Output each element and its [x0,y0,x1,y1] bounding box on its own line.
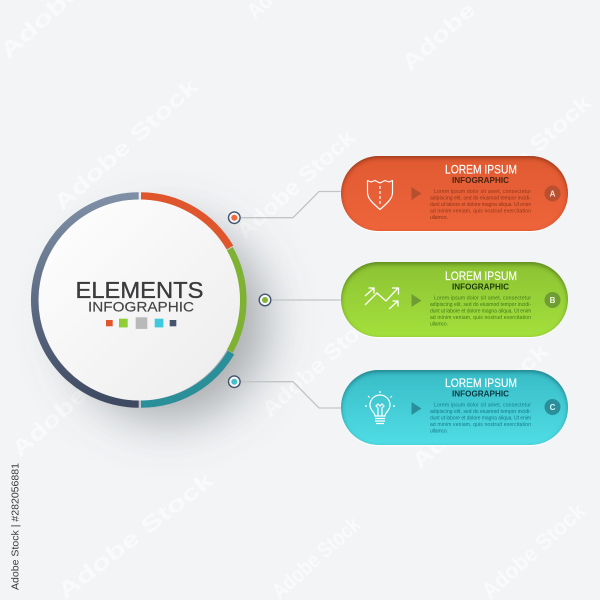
body text: ad minim veniam, quis nostrud exercitation [430,208,531,214]
watermarks: Adobe Stock [457,89,597,219]
body text: Lorem ipsum dolor sit amet, consectetur [434,189,531,195]
body text: Lorem ipsum dolor sit amet, consectetur [434,296,531,302]
badge C: C [550,403,556,412]
body text: ullamco. [430,428,448,434]
watermarks: Adobe Stock [232,124,360,244]
watermarks: Adobe Stock [7,322,158,462]
panel: C [341,370,568,445]
panel: A: INFOGRAPHIC [452,175,509,185]
body text: ullamco. [430,322,448,328]
arrow [412,402,422,415]
body text: adipiscing elit, sed do eiusmod tempor incidi- [430,302,531,308]
badge A [544,186,560,202]
color squares [106,317,176,329]
panel: A [341,156,568,231]
body text: adipiscing elit, sed do eiusmod tempor incidi- [430,409,531,415]
icon: light bulb [365,391,395,424]
body text: dunt ut labore et dolore magna aliqua. Ut enim [430,202,531,208]
body text: dunt ut labore et dolore magna aliqua. Ut enim [430,308,531,314]
circle face [39,200,240,400]
node: green [259,294,271,306]
ring: red segment [141,196,230,248]
node: teal [228,376,240,388]
watermarks: Adobe [397,0,480,76]
ring: teal segment [141,352,231,404]
body text: ullamco. [430,215,448,221]
panel: B: INFOGRAPHIC [452,281,509,291]
icon: shield [368,180,392,210]
node: red [228,212,240,224]
arrow [412,294,422,307]
watermarks: Adobe Stock [49,73,204,216]
arrow [412,187,422,200]
body text [430,296,531,328]
body text: adipiscing elit, sed do eiusmod tempor incidi- [430,196,531,202]
heading: LOREM IPSUM [445,378,517,390]
panel: B [341,262,568,337]
body text: dunt ut labore et dolore magna aliqua. Ut enim [430,416,531,422]
ring: green segment [230,249,243,351]
watermarks: Adobe Stock [257,302,385,422]
heading: LOREM IPSUM [445,271,517,283]
center title: ELEMENTS [76,277,204,303]
badge B [544,292,560,308]
stock id label: Adobe Stock | #282056881 [10,463,22,590]
body text: Lorem ipsum dolor sit amet, consectetur [434,402,531,408]
watermarks: Adobe Stock [407,337,554,474]
body text [430,189,531,221]
body text: ad minim veniam, quis nostrud exercitation [430,315,531,321]
heading: LOREM IPSUM [445,164,517,176]
ring: slate half [35,196,139,404]
panel: C: INFOGRAPHIC [452,388,509,398]
circle shadow [68,222,268,422]
badge B: B [550,296,556,305]
badge C [544,399,560,415]
center title: INFOGRAPHIC [88,298,194,314]
body text [430,402,531,434]
body text: ad minim veniam, quis nostrud exercitation [430,422,531,428]
center title [76,277,204,314]
badge A: A [550,190,556,198]
icon: arrows [365,288,398,309]
